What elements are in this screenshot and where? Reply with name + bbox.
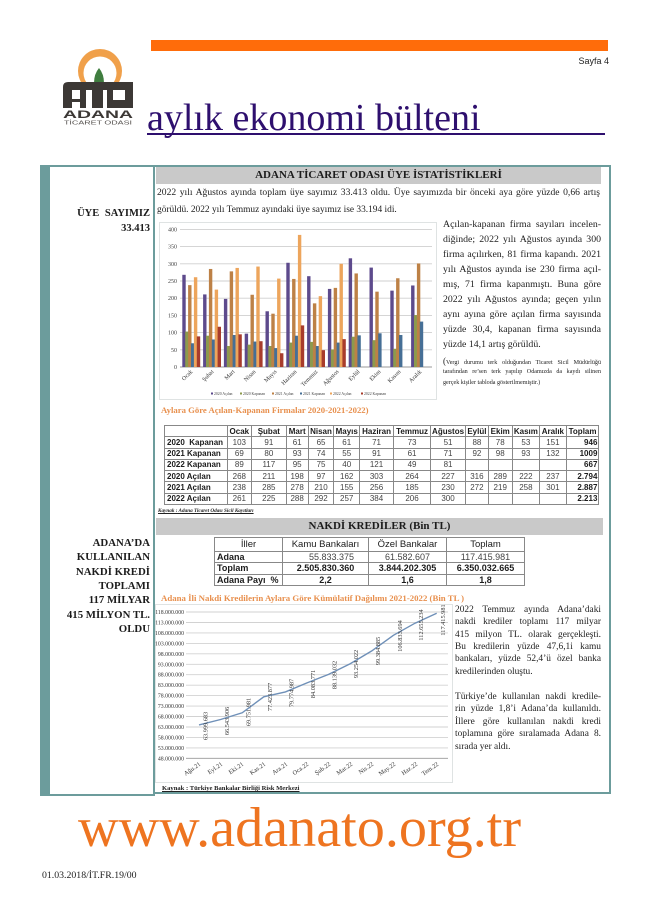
table: firms opened and closed: 301 <box>546 483 560 492</box>
y axis labels: 100 <box>168 331 177 337</box>
table: cash credits: 1,6 <box>401 575 414 585</box>
table: firms opened and closed: 300 <box>441 494 455 503</box>
table: firms opened and closed: 61 <box>293 438 302 447</box>
table: firms opened and closed: 258 <box>519 483 533 492</box>
text block: credit analysis: toplamına göre sıralamada Adana 8. <box>455 729 601 739</box>
y axis labels: 48.000.000 <box>158 756 184 762</box>
table: firms opened and closed: 2022 Açılan <box>167 494 211 503</box>
table: firms opened and closed: 285 <box>262 483 276 492</box>
x axis month labels: Haziran <box>281 369 298 387</box>
x axis month labels <box>181 368 423 388</box>
x axis month labels: Kasım <box>387 369 403 384</box>
x axis month labels: Nis.22 <box>358 761 375 776</box>
y axis labels: 98.000.000 <box>158 652 184 658</box>
x axis month labels: Kas.21 <box>249 761 267 777</box>
x axis month labels: May.22 <box>378 761 397 778</box>
table: firms opened and closed: 75 <box>317 460 325 469</box>
text block: firm analysis: 2022 yılı Ağustos ayında; geçen yılın <box>443 294 601 305</box>
side label: cash credit total: KULLANILAN <box>77 551 150 563</box>
table: firms opened and closed: 88 <box>472 438 481 447</box>
bulletin title: aylık ekonomi bülteni <box>147 97 481 139</box>
credit trend line <box>199 613 437 725</box>
table: firms opened and closed: Ağustos <box>432 427 464 436</box>
text block: credit analysis: sırada yer aldı. <box>455 742 510 752</box>
table: firms opened and closed: 2021 Açılan <box>167 483 211 492</box>
table: firms opened and closed: 303 <box>370 472 383 481</box>
series: 2022 Kapanan <box>197 325 346 367</box>
y axis labels: 108.000.000 <box>155 631 184 637</box>
y axis labels <box>168 227 177 371</box>
table: firms opened and closed: 55 <box>342 449 351 458</box>
side label: member count: 33.413 <box>121 223 150 234</box>
table: firms opened and closed: Mart <box>289 427 306 436</box>
table: firms opened and closed: 211 <box>262 472 275 481</box>
section heading: member statistics <box>156 167 601 184</box>
chart legend: 2020 Kapanan <box>243 392 265 396</box>
text block: credit analysis <box>455 605 601 752</box>
table: firms opened and closed: 162 <box>340 472 353 481</box>
table: cash credits: 2,2 <box>319 575 332 585</box>
table: firms opened and closed: 268 <box>233 472 246 481</box>
text block: deregistration note <box>443 356 601 386</box>
table: firms opened and closed: 2.887 <box>577 483 597 492</box>
text block: firm analysis: yüzde 30,4, kapanan firma sayısında <box>443 324 601 335</box>
table: firms opened and closed: Ocak <box>230 427 249 436</box>
y axis labels: 118.000.000 <box>155 610 184 616</box>
text block: credit analysis: Bu kredilerin yüzde 47,6,1i kamu <box>455 642 601 652</box>
data labels: 88.139.032 <box>332 661 338 689</box>
table: firms opened and closed: 151 <box>546 438 560 447</box>
y axis labels: 58.000.000 <box>158 735 184 741</box>
text block: credit analysis: kredilerinden oluştu. <box>455 666 533 676</box>
x axis month labels: Eyl.21 <box>207 761 224 776</box>
table: firms opened and closed: 93 <box>521 449 530 458</box>
chart legend: 2022 Kapanan <box>364 392 386 396</box>
table: firms opened and closed: Toplam <box>569 427 596 436</box>
table: firms opened and closed: Kasım <box>514 427 538 436</box>
data labels: 112.655.234 <box>418 609 425 641</box>
table: firms opened and closed: 2020 Açılan <box>167 472 211 481</box>
table: firms opened and closed: 198 <box>290 472 304 481</box>
data labels: 93.254.022 <box>353 650 360 678</box>
text block: firm analysis: mış, 71 firma kapanmıştı. Buna göre <box>443 279 601 290</box>
table: firms opened and closed: Aralık <box>542 427 564 436</box>
text block: credit analysis: rin yüzde 1,8’i Adana’da kullanıldı. <box>455 704 601 714</box>
data labels: 69.751.981 <box>246 698 252 726</box>
table: cash credits: 55.833.375 <box>309 552 354 562</box>
table: firms opened and closed: 289 <box>494 472 507 481</box>
x axis month labels <box>183 761 440 778</box>
table: firms opened and closed: Temmuz <box>396 427 428 436</box>
table: firms opened and closed: 2.794 <box>577 472 597 481</box>
series: 2022 Açılan <box>194 235 343 367</box>
table: firms opened and closed: 71 <box>444 449 452 458</box>
bar chart: firms opened and closed by month <box>159 222 437 400</box>
section heading: cash credits <box>156 518 603 535</box>
table: firms opened and closed: 40 <box>342 460 351 469</box>
text block: firm analysis: diğinde; 2022 yılı Ağustos ayında 300 <box>443 234 601 245</box>
x axis month labels: Ocak <box>181 369 194 382</box>
page number: Sayfa 4 <box>578 56 609 66</box>
data labels <box>202 604 447 740</box>
series: 2020 Açılan <box>182 258 414 367</box>
website address: www.adanato.org.tr <box>78 797 521 859</box>
line chart: cumulative cash credits <box>155 604 453 783</box>
table: firms opened and closed: 185 <box>405 483 419 492</box>
side label: cash credit total: 117 MİLYAR <box>89 594 150 606</box>
table: cash credits: İller <box>241 539 256 550</box>
x axis month labels: Temmuz <box>300 369 320 388</box>
table: firms opened and closed: 264 <box>405 472 419 481</box>
table: cash credits: Kamu Bankaları <box>292 539 359 550</box>
x axis month labels: Ağustos <box>322 368 341 387</box>
orange header bar <box>151 40 608 51</box>
table: firms opened and closed: 89 <box>235 460 244 469</box>
table: firms opened and closed: 132 <box>546 449 560 458</box>
table: firms opened and closed: 73 <box>408 438 416 447</box>
table: cash credits: Toplam <box>470 539 501 550</box>
data labels: 77.423.877 <box>267 683 274 711</box>
table: firms opened and closed: 292 <box>314 494 328 503</box>
intro paragraph: 2022 yılı Ağustos ayında toplam üye sayımız 33.413 oldu. Üye sayımızda bir önceki aya göre yüzde 0,66 artış <box>157 187 600 198</box>
data labels: 66.543.906 <box>224 707 231 735</box>
y axis labels: 400 <box>168 227 177 233</box>
frame: teal left band <box>40 165 50 796</box>
data labels: 99.384.885 <box>375 637 382 665</box>
table: firms opened and closed: 227 <box>441 472 455 481</box>
section heading: cash credits: NAKDİ KREDİLER (Bin TL) <box>309 520 450 532</box>
table: firms opened and closed: 69 <box>235 449 244 458</box>
series: 2021 Açılan <box>188 263 420 367</box>
table: firms opened and closed: 261 <box>233 494 246 503</box>
y axis labels: 250 <box>168 279 177 285</box>
logo: orange cotton ring <box>74 49 126 96</box>
y axis labels: 73.000.000 <box>158 704 184 710</box>
logo: ATO letters <box>63 82 133 108</box>
side label: member count: ÜYE SAYIMIZ <box>77 208 150 219</box>
text block: firm analysis: yüzde 14,1 artış görüldü. <box>443 339 541 350</box>
chart legend: 2022 Açılan <box>333 392 352 396</box>
y axis labels: 113.000.000 <box>155 620 184 626</box>
chart caption: firms: Aylara Göre Açılan-Kapanan Firmalar 2020-2021-2022) <box>161 405 369 415</box>
side label: cash credit total <box>67 537 150 635</box>
y axis labels: 150 <box>168 313 177 319</box>
table: firms opened and closed: 91 <box>372 449 381 458</box>
text block: firm analysis: yılı Ağustos ayında ise 230 firma açıl- <box>443 264 601 275</box>
table: firms opened and closed: 946 <box>584 438 597 447</box>
table: firms opened and closed: 222 <box>519 472 533 481</box>
table: firms opened and closed: Haziran <box>362 427 391 436</box>
table: firms opened and closed: 316 <box>470 472 484 481</box>
table: cash credits <box>214 537 525 586</box>
y axis labels: 63.000.000 <box>158 725 184 731</box>
x axis month labels: Eki.21 <box>228 761 245 776</box>
table: firms opened and closed: 257 <box>340 494 353 503</box>
table: firms opened and closed: 256 <box>370 483 383 492</box>
x axis month labels: Şubat <box>202 369 216 383</box>
data labels: 117.415.981 <box>440 604 447 636</box>
text block: credit analysis: 415 milyon TL. olarak gerçekleşti. <box>455 630 601 640</box>
x axis month labels: Ağu.21 <box>183 761 202 777</box>
table: firms opened and closed: 288 <box>290 494 304 503</box>
table: firms opened and closed: 238 <box>233 483 246 492</box>
table: firms opened and closed: 61 <box>342 438 351 447</box>
table: firms opened and closed: 272 <box>470 483 484 492</box>
table: firms opened and closed: 117 <box>262 460 275 469</box>
table: firms opened and closed: 49 <box>408 460 416 469</box>
frame: column divider <box>153 165 155 796</box>
table: firms opened and closed: 206 <box>405 494 419 503</box>
table: firms opened and closed: 219 <box>494 483 507 492</box>
table: cash credits: 3.844.202.305 <box>379 563 436 573</box>
side label: cash credit total: OLDU <box>119 623 150 635</box>
table: cash credits: Adana <box>217 552 245 562</box>
table: firms opened and closed: 81 <box>444 460 452 469</box>
y axis labels: 103.000.000 <box>155 641 184 647</box>
table: cash credits: Toplam <box>217 563 248 573</box>
y axis labels: 93.000.000 <box>158 662 184 668</box>
table: firms opened and closed: 74 <box>317 449 325 458</box>
table: firms opened and closed: 225 <box>262 494 276 503</box>
table: firms opened and closed: Ekim <box>491 427 510 436</box>
table: firms opened and closed: 97 <box>317 472 325 481</box>
side label: cash credit total: ADANA’DA <box>93 537 150 549</box>
x axis month labels: Mar.22 <box>335 761 354 777</box>
series: 2021 Kapanan <box>191 322 423 367</box>
text block: credit analysis: nakdi krediler toplamı 117 milyar <box>455 617 601 627</box>
table: firms opened and closed: 237 <box>546 472 560 481</box>
data labels: 79.774.987 <box>288 679 296 707</box>
x axis month labels: Eylül <box>348 369 362 383</box>
table: firms opened and closed: 80 <box>264 449 273 458</box>
y axis labels: 50 <box>171 348 177 354</box>
x axis month labels: Oca.22 <box>291 761 310 777</box>
source note: banks association: Kaynak : Türkiye Bankalar Birliği Risk Merkezi <box>162 785 300 792</box>
table: firms opened and closed: 92 <box>472 449 481 458</box>
table: firms opened and closed: Nisan <box>310 427 332 436</box>
chart legend: 2021 Kapanan <box>303 392 325 396</box>
table: firms opened and closed: 210 <box>314 483 328 492</box>
intro paragraph: görüldü. 2022 yılı Temmuz ayındaki üye sayımız ise 33.194 idi. <box>157 205 397 215</box>
table: firms opened and closed: 65 <box>317 438 325 447</box>
table: cash credits: 61.582.607 <box>385 552 430 562</box>
table: firms opened and closed: 667 <box>584 460 597 469</box>
table: firms opened and closed: Şubat <box>258 427 280 436</box>
side label: cash credit total: TOPLAMI <box>99 580 150 592</box>
intro paragraph <box>157 187 600 215</box>
table: firms opened and closed: 2022 Kapanan <box>167 460 221 469</box>
text block: deregistration note: gerçek kişiler tabloda gösterilmemiştir.) <box>443 380 540 386</box>
text block: firm analysis <box>443 219 601 350</box>
table: cash credits: 1,8 <box>479 575 492 585</box>
table: firms opened and closed: 78 <box>496 438 505 447</box>
y axis labels: 200 <box>168 296 177 302</box>
table: firms opened and closed: 71 <box>372 438 381 447</box>
source note: firms table: Kaynak : Adana Ticaret Odası Sicil Kayıtları <box>158 508 254 514</box>
chart legend <box>211 392 386 396</box>
y axis labels: 78.000.000 <box>158 694 184 700</box>
table: firms opened and closed: 2021 Kapanan <box>167 449 221 458</box>
text block: deregistration note: tarafından re’sen terk yapılıp Odamızda da kaydı silinen <box>443 369 601 375</box>
frame: top border <box>40 165 611 167</box>
logo: green bud <box>94 68 104 83</box>
data labels: 106.833.694 <box>397 619 404 652</box>
data labels: 84.083.771 <box>310 670 317 698</box>
x axis month labels: Ekim <box>369 369 383 383</box>
text block: firm analysis: Açılan-kapanan firma sayıları incelen- <box>443 219 601 230</box>
table: firms opened and closed: 51 <box>444 438 452 447</box>
table: firms opened and closed: 91 <box>264 438 273 447</box>
y axis labels: 300 <box>168 262 177 268</box>
table: firms opened and closed: Eylül <box>467 427 486 436</box>
frame: bottom border right <box>154 792 611 794</box>
data labels: 63.999.683 <box>202 712 210 740</box>
logo: Adana Ticaret Odası <box>63 49 133 126</box>
x axis month labels: Mayıs <box>264 369 279 384</box>
table: firms opened and closed: 1009 <box>580 449 597 458</box>
table: firms opened and closed: 121 <box>370 460 383 469</box>
side label: cash credit total: 415 MİLYON TL. <box>67 609 150 621</box>
chart legend: 2020 Açılan <box>214 392 233 396</box>
x axis month labels: Haz.22 <box>400 761 419 777</box>
logo: TİCARET ODASI wordmark: TİCARET ODASI <box>64 120 133 126</box>
title underline rule <box>147 133 605 134</box>
table: firms opened and closed <box>164 425 599 505</box>
x axis month labels: Mart <box>224 369 237 382</box>
form code footer: 01.03.2018/İT.FR.19/00 <box>42 870 137 881</box>
y axis labels: 53.000.000 <box>158 746 184 752</box>
table: cash credits: Özel Bankalar <box>378 539 437 550</box>
chart legend: 2021 Açılan <box>275 392 294 396</box>
table: firms opened and closed: 230 <box>441 483 455 492</box>
table: firms opened and closed: 384 <box>370 494 383 503</box>
text block: firm analysis: aynı ayına göre açılan firma sayısında <box>443 309 601 320</box>
y axis labels: 68.000.000 <box>158 714 184 720</box>
text block: deregistration note: (Vergi durumu terk olduğundan Ticaret Sicil Müdürlüğü <box>443 356 601 366</box>
x axis month labels: Şub.22 <box>314 761 332 777</box>
y axis labels: 350 <box>168 245 177 251</box>
y axis labels <box>155 610 184 762</box>
x axis month labels: Nisan <box>243 369 257 383</box>
text block: credit analysis: Türkiye’de kullanılan nakdi kredile- <box>455 692 601 702</box>
table: cash credits: 2.505.830.360 <box>297 563 354 573</box>
table: cash credits: Adana Payı % <box>217 575 279 585</box>
table: firms opened and closed: Mayıs <box>336 427 358 436</box>
main frame <box>40 165 611 796</box>
y axis labels: 0 <box>174 365 177 371</box>
table: firms opened and closed: 93 <box>293 449 302 458</box>
frame: bottom border left <box>40 794 154 796</box>
table: cash credits: 6.350.032.665 <box>457 563 514 573</box>
x axis month labels: Aralık <box>408 369 423 384</box>
table: firms opened and closed: 2020 Kapanan <box>167 438 223 447</box>
logo: ADANA wordmark: ADANA <box>63 109 133 121</box>
table: firms opened and closed: 53 <box>521 438 530 447</box>
table: cash credits: 117.415.981 <box>461 552 510 562</box>
text block: credit analysis: bankaları, yüzde 52,4’ü özel banka <box>455 654 601 664</box>
y axis labels: 88.000.000 <box>158 673 184 679</box>
y axis labels: 83.000.000 <box>158 683 184 689</box>
table: firms opened and closed: 278 <box>290 483 304 492</box>
x axis month labels: Tem.22 <box>421 761 440 778</box>
table: firms opened and closed: 95 <box>293 460 302 469</box>
table: firms opened and closed: 103 <box>233 438 246 447</box>
series: 2020 Kapanan <box>185 315 417 367</box>
chart caption: credits: Adana İli Nakdi Kredilerin Aylara Göre Kümülatif Dağılımı 2021-2022 (Bin TL ) <box>161 593 464 603</box>
side label: cash credit total: NAKDİ KREDİ <box>76 566 150 578</box>
table: firms opened and closed: 2.213 <box>577 494 597 503</box>
side label: member count <box>77 207 150 234</box>
table: firms opened and closed: 61 <box>408 449 416 458</box>
text block: credit analysis: 2022 Temmuz ayında Adana’daki <box>455 605 601 615</box>
x axis month labels: Ara.21 <box>271 761 289 777</box>
frame: right border <box>609 165 611 793</box>
text block: credit analysis: İllere göre kullanılan nakdi kredi <box>455 716 601 726</box>
table: firms opened and closed: 98 <box>496 449 505 458</box>
table: firms opened and closed: 155 <box>340 483 353 492</box>
section heading: member statistics: ADANA TİCARET ODASI ÜYE İSTATİSTİKLERİ <box>255 169 502 181</box>
text block: firm analysis: firma açılırken, 81 firma kapandı. 2021 <box>443 249 601 260</box>
